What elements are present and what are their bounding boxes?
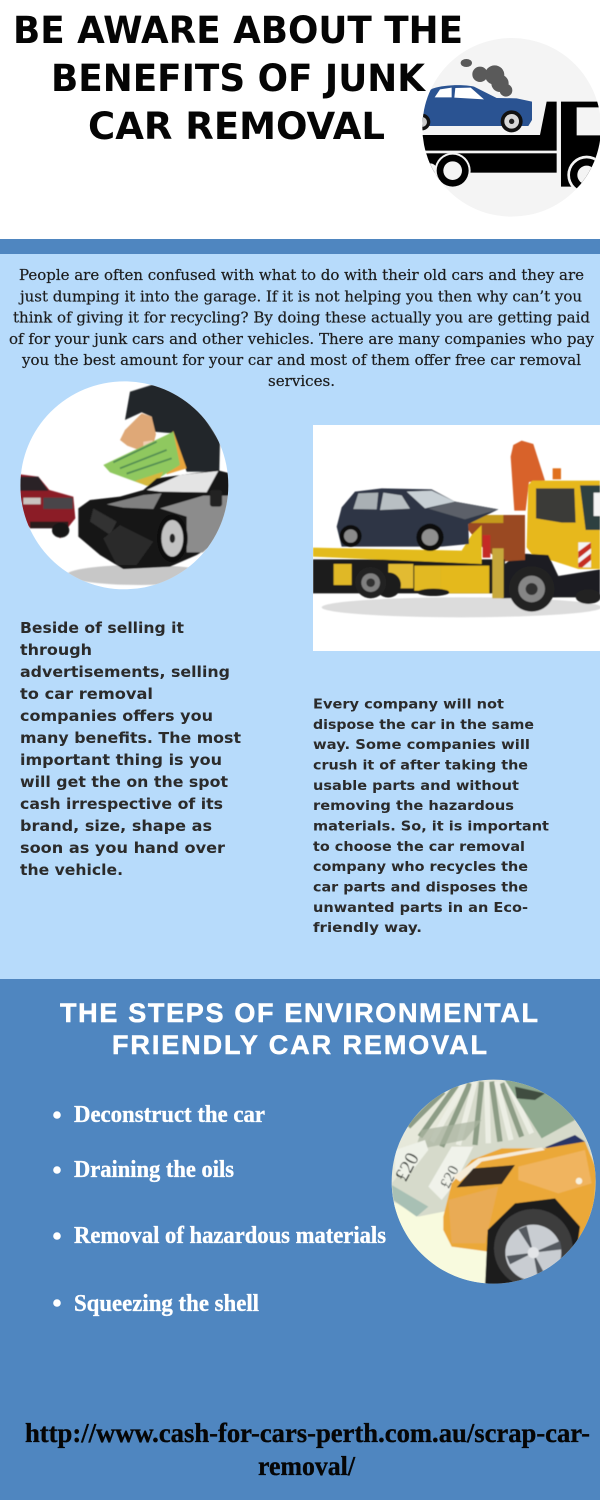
link: website url: removal/: [258, 1451, 355, 1481]
text block: eco-friendly disposal: materials. So, it is important: [313, 818, 550, 834]
text block: eco-friendly disposal: crush it of after taking the: [313, 758, 528, 774]
photo: yellow flatbed tow truck carrying wrecked car: [313, 425, 600, 651]
text block: selling to car removal companies: brand, size, shape as: [20, 817, 212, 835]
photo: orange car over banknotes: [392, 1080, 598, 1288]
text block: selling to car removal companies: to car removal: [20, 685, 153, 703]
panel: steps section: [0, 979, 600, 1500]
panel: light blue content section: [0, 254, 600, 979]
text block: selling to car removal companies: advertisements, selling: [20, 663, 230, 681]
text block: eco-friendly disposal: to choose the car removal: [313, 839, 525, 855]
text block: eco-friendly disposal: Every company will not: [313, 696, 505, 712]
text block: introduction: just dumping it into the garage. If it is not helping you then why can’t you: [18, 290, 582, 306]
text block: eco-friendly disposal: usable parts and without: [313, 778, 520, 794]
text block: introduction: People are often confused with what to do with their old cars and they are: [19, 268, 584, 284]
list: removal steps: [53, 1102, 386, 1317]
icon: tow truck carrying a smoking blue car: [414, 38, 600, 217]
photo: cash offered over wrecked car: [20, 381, 230, 589]
text block: selling to car removal companies: will get the on the spot: [20, 773, 228, 791]
title: BENEFITS OF JUNK: [51, 57, 426, 100]
text block: introduction: think of giving it for recycling? By doing these actually you are getting paid: [13, 310, 590, 326]
text block: introduction: [9, 268, 595, 390]
text block: introduction: services.: [268, 374, 335, 390]
link: website url: [25, 1418, 590, 1481]
text block: selling to car removal companies: cash irrespective of its: [20, 795, 223, 813]
text block: eco-friendly disposal: way. Some companies will: [313, 737, 530, 753]
text block: selling to car removal companies: the vehicle.: [20, 861, 123, 879]
panel: header background: [0, 0, 600, 239]
title: [13, 9, 463, 148]
text block: introduction: you the best amount for your car and most of them offer free car removal: [21, 353, 581, 369]
title: BE AWARE ABOUT THE: [13, 9, 463, 52]
step: deconstruct: Deconstruct the car: [74, 1102, 265, 1128]
heading: steps of environmental friendly car removal: FRIENDLY CAR REMOVAL: [112, 1030, 487, 1060]
photo: orange car over banknotes: £20: [437, 1163, 463, 1191]
text block: eco-friendly disposal: removing the hazardous: [313, 798, 514, 814]
text block: selling to car removal companies: Beside of selling it: [20, 619, 184, 637]
text block: selling to car removal companies: [20, 619, 241, 879]
text block: selling to car removal companies: soon as you hand over: [20, 839, 226, 857]
text block: selling to car removal companies: many benefits. The most: [20, 729, 241, 747]
text block: introduction: of for your junk cars and other vehicles. There are many companies who pay: [9, 332, 595, 348]
text block: selling to car removal companies: through: [20, 641, 92, 659]
text block: eco-friendly disposal: dispose the car in the same: [313, 717, 534, 733]
link: website url: http://www.cash-for-cars-perth.com.au/scrap-car-: [25, 1418, 590, 1448]
text block: eco-friendly disposal: car parts and disposes the: [313, 880, 528, 896]
photo: orange car over banknotes: £20: [392, 1150, 424, 1185]
text block: eco-friendly disposal: [313, 696, 550, 936]
heading: steps of environmental friendly car removal: THE STEPS OF ENVIRONMENTAL: [60, 998, 538, 1028]
text block: eco-friendly disposal: company who recycles the: [313, 859, 528, 875]
panel: header stripe: [0, 239, 600, 254]
text block: selling to car removal companies: important thing is you: [20, 751, 222, 769]
text block: selling to car removal companies: companies offers you: [20, 707, 213, 725]
text block: eco-friendly disposal: friendly way.: [313, 920, 422, 936]
step: hazardous materials: Removal of hazardous materials: [74, 1223, 386, 1249]
title: CAR REMOVAL: [88, 105, 385, 148]
text block: eco-friendly disposal: unwanted parts in an Eco-: [313, 900, 528, 916]
heading: steps of environmental friendly car removal: [60, 998, 538, 1060]
step: drain oils: Draining the oils: [74, 1157, 234, 1183]
step: squeeze shell: Squeezing the shell: [74, 1291, 259, 1317]
